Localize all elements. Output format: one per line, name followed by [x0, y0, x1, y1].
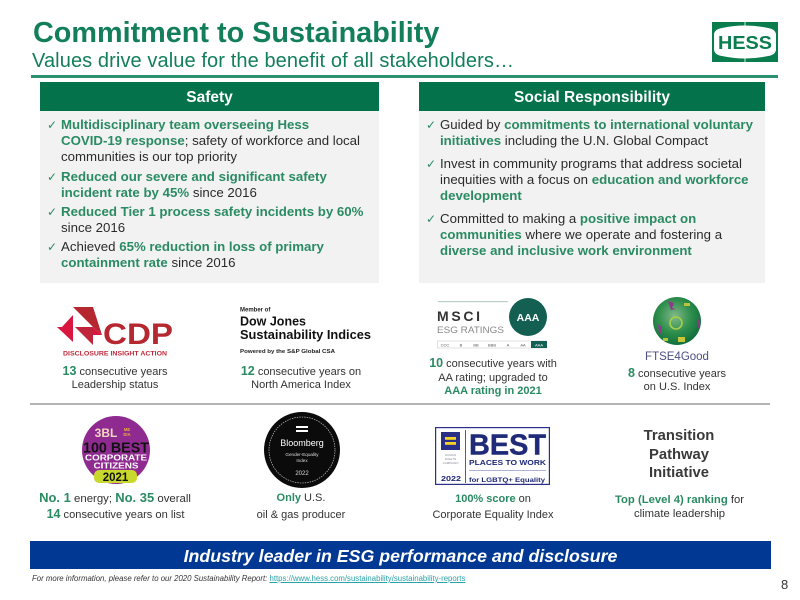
3BL caption: No. 1 energy; No. 35 overall	[39, 490, 191, 505]
Transition Pathway Initiative wordmark: Transition	[644, 428, 714, 444]
social responsibility header	[419, 82, 765, 111]
MSCI caption: 10 consecutive years with	[429, 356, 557, 370]
safety bullet 4	[47, 239, 324, 270]
FTSE4Good caption: on U.S. Index	[644, 381, 710, 393]
CDP caption: 13 consecutive years	[62, 364, 168, 378]
icon: MSCI ESG ratings logo: BB	[473, 342, 479, 348]
icon: 3BL 100 Best Corporate Citizens badge: 100 BEST	[83, 440, 149, 456]
panel: social responsibility	[419, 82, 765, 283]
safety bullet 3: ✓	[47, 205, 57, 219]
safety bullet 2: Reduced our severe and significant safety	[61, 169, 327, 184]
TPI caption: Top (Level 4) ranking for	[615, 494, 744, 506]
icon: HRC Best Places to Work logo: 2022	[441, 474, 461, 483]
icon: 3BL 100 Best Corporate Citizens badge: CITIZENS	[94, 462, 139, 470]
safety header: Safety	[186, 89, 233, 106]
icon: Bloomberg Gender-Equality Index badge: Gender-Equality	[285, 452, 319, 457]
social bullet 2: development	[440, 188, 522, 203]
icon: MSCI ESG ratings logo: AAA	[517, 312, 540, 324]
icon: CDP logo: DISCLOSURE INSIGHT ACTION	[63, 350, 168, 358]
icon: 3BL 100 Best Corporate Citizens badge: DIA	[123, 432, 131, 437]
icon: 3BL 100 Best Corporate Citizens badge: 3BL	[95, 426, 117, 440]
icon: 3BL 100 Best Corporate Citizens badge: 2021	[103, 472, 129, 484]
icon: Dow Jones Sustainability Indices logo: Member of	[240, 308, 271, 314]
icon: FTSE4Good globe	[653, 297, 701, 345]
safety bullet 2: incident rate by 45% since 2016	[61, 185, 257, 200]
icon: HRC Best Places to Work logo: RIGHTS	[445, 457, 456, 461]
Bloomberg caption: Only U.S.	[277, 492, 325, 504]
icon: Dow Jones Sustainability Indices logo: Sustainability Indices	[240, 328, 371, 342]
social bullet 2: Invest in community programs that address societal	[440, 156, 742, 171]
icon: 3BL 100 Best Corporate Citizens badge: ME	[124, 427, 130, 432]
social bullet 3: communities where we operate and fostering a	[440, 227, 722, 242]
icon: MSCI ESG ratings logo: AAA	[535, 342, 543, 348]
icon: HRC Best Places to Work logo: BEST	[469, 430, 546, 462]
icon: Hess logo: HESS	[718, 33, 772, 53]
icon: HRC Best Places to Work logo: PLACES TO WORK	[469, 458, 547, 467]
icon: Dow Jones Sustainability Indices logo: Powered by the S&P Global CSA	[240, 349, 336, 355]
social bullet 1: Guided by commitments to international voluntary	[440, 117, 753, 132]
FTSE4Good caption	[628, 351, 726, 393]
MSCI caption: AAA rating in 2021	[444, 385, 542, 397]
footnote: For more information, please refer to our 2020 Sustainability Report: https://www.hess.com/sustainability/sustainability-reports	[32, 574, 465, 583]
social bullet 1: initiatives including the U.N. Global Compact	[440, 133, 708, 148]
social bullet 2: inequities with a focus on education and workforce	[440, 172, 749, 187]
MSCI caption: AA rating; upgraded to	[438, 372, 548, 384]
icon: Bloomberg Gender-Equality Index badge: Index	[296, 458, 308, 463]
icon: MSCI ESG ratings logo	[437, 298, 547, 348]
panel: safety	[40, 82, 379, 283]
page number: 8	[781, 577, 788, 592]
safety bullet 1: COVID-19 response; safety of workforce and local	[61, 133, 360, 148]
Transition Pathway Initiative wordmark: Pathway	[649, 447, 709, 463]
Bloomberg caption: oil & gas producer	[257, 509, 345, 521]
icon: Bloomberg Gender-Equality Index badge: 2022	[295, 471, 309, 477]
safety bullet 1	[47, 117, 360, 164]
HRC caption: 100% score on	[455, 493, 531, 505]
MSCI caption	[429, 356, 557, 397]
icon: 3BL 100 Best Corporate Citizens badge	[82, 416, 150, 484]
icon: CDP logo: CDP	[103, 318, 173, 351]
TPI caption	[615, 494, 744, 520]
icon: MSCI ESG ratings logo: CCC	[441, 342, 449, 348]
icon: HRC Best Places to Work logo: CAMPAIGN	[443, 461, 458, 465]
safety bullet 2	[47, 169, 327, 200]
icon: MSCI ESG ratings logo: AA	[520, 342, 526, 348]
social bullet 3: diverse and inclusive work environment	[440, 243, 692, 258]
icon: 3BL 100 Best Corporate Citizens badge: CORPORATE	[85, 454, 148, 462]
social bullet 1: ✓	[426, 118, 436, 132]
safety bullet 1: ✓	[47, 118, 57, 132]
banner: Industry leader in ESG performance and disclosure	[184, 546, 617, 566]
FTSE4Good wordmark: FTSE4Good	[645, 351, 709, 363]
social responsibility header: Social Responsibility	[514, 89, 670, 106]
icon: MSCI ESG ratings logo: B	[460, 342, 463, 348]
TPI caption: climate leadership	[634, 508, 725, 520]
HRC caption: Corporate Equality Index	[432, 509, 554, 521]
safety bullet 4: ✓	[47, 240, 57, 254]
3BL caption	[39, 490, 191, 521]
HRC caption	[432, 493, 554, 521]
icon: HRC Best Places to Work logo: HUMAN	[445, 453, 456, 457]
icon: CDP logo	[57, 307, 173, 358]
social bullet 3: ✓	[426, 212, 436, 226]
icon: Bloomberg Gender-Equality Index badge: Bloomberg	[280, 438, 324, 448]
icon: Bloomberg Gender-Equality Index badge	[264, 412, 340, 488]
safety bullet 1: communities is our top priority	[61, 149, 237, 164]
Dow Jones caption: North America Index	[251, 379, 351, 391]
social bullet 1	[426, 117, 753, 148]
3BL caption: 14 consecutive years on list	[47, 507, 184, 521]
icon: Dow Jones Sustainability Indices logo	[240, 307, 371, 355]
icon: MSCI ESG ratings logo: MSCI	[437, 308, 480, 324]
social bullet 3	[426, 211, 722, 258]
icon: MSCI ESG ratings logo: ESG RATINGS	[437, 325, 504, 336]
social bullet 2	[426, 156, 749, 203]
safety header	[40, 82, 379, 111]
safety bullet 3: since 2016	[61, 220, 125, 235]
safety bullet 4: containment rate since 2016	[61, 255, 236, 270]
icon: MSCI ESG ratings logo: A	[507, 342, 510, 348]
Bloomberg caption	[257, 492, 346, 521]
CDP caption	[62, 364, 168, 391]
safety bullet 1: Multidisciplinary team overseeing Hess	[61, 117, 309, 132]
safety bullet 3: Reduced Tier 1 process safety incidents by 60%	[61, 204, 363, 219]
Transition Pathway Initiative wordmark	[644, 428, 714, 481]
Dow Jones caption	[241, 364, 361, 391]
icon: HRC Best Places to Work logo	[435, 427, 550, 485]
social bullet 3: Committed to making a positive impact on	[440, 211, 696, 226]
social bullet 2: ✓	[426, 157, 436, 171]
safety bullet 3	[47, 204, 364, 235]
safety bullet 4: Achieved 65% reduction in loss of primary	[61, 239, 324, 254]
FTSE4Good caption: 8 consecutive years	[628, 366, 726, 380]
icon: Dow Jones Sustainability Indices logo: Dow Jones	[240, 314, 306, 328]
icon: Hess logo	[712, 22, 778, 62]
Transition Pathway Initiative wordmark: Initiative	[649, 465, 709, 481]
safety bullet 2: ✓	[47, 170, 57, 184]
title: Commitment to Sustainability	[33, 17, 439, 49]
banner	[30, 541, 771, 569]
CDP caption: Leadership status	[72, 379, 158, 391]
icon: HRC Best Places to Work logo: for LGBTQ+ Equality	[469, 477, 546, 484]
subtitle: Values drive value for the benefit of all stakeholders…	[32, 50, 514, 72]
icon: MSCI ESG ratings logo: BBB	[488, 342, 496, 348]
Dow Jones caption: 12 consecutive years on	[241, 364, 361, 378]
